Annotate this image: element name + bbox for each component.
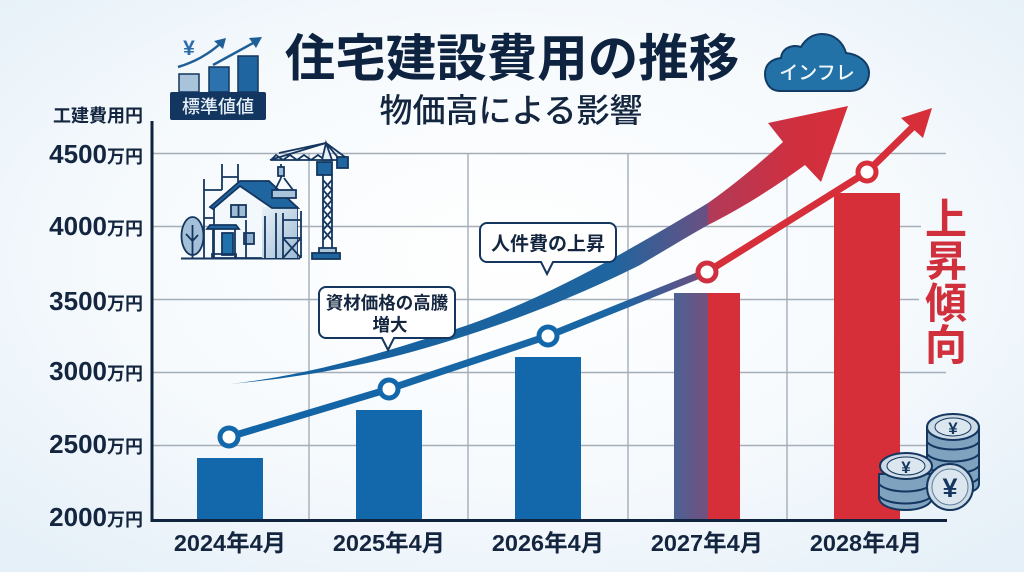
icon: yen coin stacks: ¥ [942, 473, 958, 503]
x axis labels: 2025年4月 [333, 530, 445, 556]
icon: inflation cloud [765, 34, 869, 91]
y axis labels: 3500万円 [49, 286, 143, 316]
icon: yen coin stacks: ¥ [948, 419, 958, 438]
big swoosh arrow [230, 106, 848, 384]
x axis labels: 2027年4月 [651, 530, 763, 556]
title: 住宅建設費用の推移 [285, 30, 739, 87]
icon: rising bars badge [170, 37, 266, 120]
bar chart [197, 193, 900, 520]
icon: inflation cloud: インフレ [779, 63, 855, 84]
y axis labels: 3000万円 [49, 356, 143, 386]
callout: material prices [319, 287, 455, 350]
x axis labels [174, 530, 922, 556]
x axis labels: 2024年4月 [174, 530, 286, 556]
icon: rising bars badge: 標準値値 [182, 97, 254, 117]
y axis labels [49, 139, 143, 532]
icon: yen coin stacks [879, 414, 979, 510]
y axis title: 工建費用円 [53, 106, 143, 126]
rising trend vertical label [925, 196, 967, 369]
y axis labels: 4500万円 [49, 139, 143, 169]
x axis labels: 2028年4月 [810, 530, 922, 556]
callout: labor cost [480, 223, 616, 274]
rising trend vertical label: 昇 [925, 238, 967, 285]
y axis labels: 4000万円 [49, 211, 143, 241]
icon: yen coin stacks: ¥ [901, 458, 911, 477]
callout: material prices: 増大 [372, 315, 408, 335]
rising trend vertical label: 傾 [925, 280, 967, 327]
rising trend vertical label: 向 [925, 322, 967, 369]
chart gridlines [153, 153, 946, 520]
callout: material prices: 資材価格の高騰 [326, 293, 449, 313]
y axis labels: 2500万円 [49, 429, 143, 459]
rising trend vertical label: 上 [925, 196, 967, 243]
trend line with markers [220, 108, 932, 446]
subtitle: 物価高による影響 [379, 92, 643, 129]
axes [152, 121, 947, 520]
x axis labels: 2026年4月 [492, 530, 604, 556]
callout: labor cost: 人件費の上昇 [491, 233, 605, 255]
icon: rising bars badge: ¥ [183, 37, 195, 60]
icon: house under construction with crane [181, 143, 348, 259]
y axis labels: 2000万円 [49, 502, 143, 532]
